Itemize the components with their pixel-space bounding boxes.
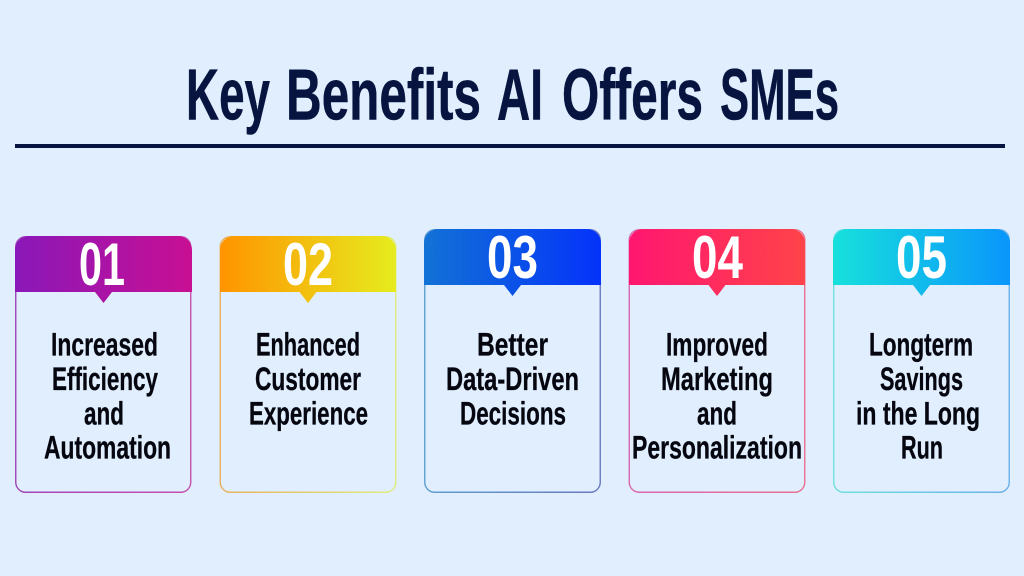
- card 2 border: [220, 237, 396, 492]
- card 2 text: Customer: [255, 361, 361, 397]
- card 3 text: Data-Driven: [446, 361, 579, 397]
- card 4 text: Improved: [666, 326, 768, 362]
- card 5 text: Longterm: [869, 326, 973, 362]
- card 4 number: 04: [692, 224, 743, 291]
- card 5 text: Run: [901, 430, 943, 466]
- title underline: [15, 144, 1005, 148]
- card 3 text: Better: [477, 326, 548, 362]
- card 4 text: Personalization: [632, 430, 802, 466]
- card 1 text: [44, 326, 171, 466]
- card 3 text: [446, 326, 579, 432]
- panel: card 2: [220, 231, 396, 492]
- card 2 text: Enhanced: [256, 326, 360, 362]
- panel: card 5: [833, 224, 1010, 492]
- card 1 number: 01: [79, 231, 125, 298]
- card 4 header: [629, 229, 805, 296]
- card 5 number: 05: [896, 224, 947, 291]
- card 5 text: Savings: [880, 361, 963, 397]
- card 1 text: Increased: [51, 326, 158, 362]
- card 4 text: Marketing: [661, 361, 773, 397]
- card 1 border: [16, 237, 191, 492]
- card 3 border: [425, 230, 600, 492]
- title: Benefits: [286, 56, 481, 136]
- card 2 header: [220, 236, 396, 303]
- title: Key: [186, 56, 270, 136]
- panel: card 4: [629, 224, 805, 492]
- card 4 text: [632, 326, 802, 466]
- card 3 number: 03: [487, 224, 538, 291]
- card 4 text: and: [697, 396, 737, 432]
- card 3 text: Decisions: [460, 396, 566, 432]
- card 5 text: [856, 326, 980, 466]
- card 1 header: [15, 236, 192, 303]
- card 5 text: in the Long: [856, 396, 980, 432]
- title: Offers: [562, 56, 703, 136]
- card 5 header: [833, 229, 1010, 296]
- panel: card 3: [424, 224, 601, 492]
- card 4 border: [629, 230, 805, 492]
- card 3 header: [424, 229, 601, 296]
- title: SMEs: [720, 56, 839, 136]
- card 1 text: and: [84, 396, 124, 432]
- title: AI: [497, 56, 543, 136]
- card 2 number: 02: [283, 231, 333, 298]
- panel: card 1: [15, 231, 192, 492]
- card 1 text: Automation: [44, 430, 171, 466]
- card 2 text: [249, 326, 368, 432]
- card 2 text: Experience: [249, 396, 368, 432]
- title: [186, 56, 839, 136]
- card 1 text: Efficiency: [52, 361, 158, 397]
- card 5 border: [834, 230, 1009, 492]
